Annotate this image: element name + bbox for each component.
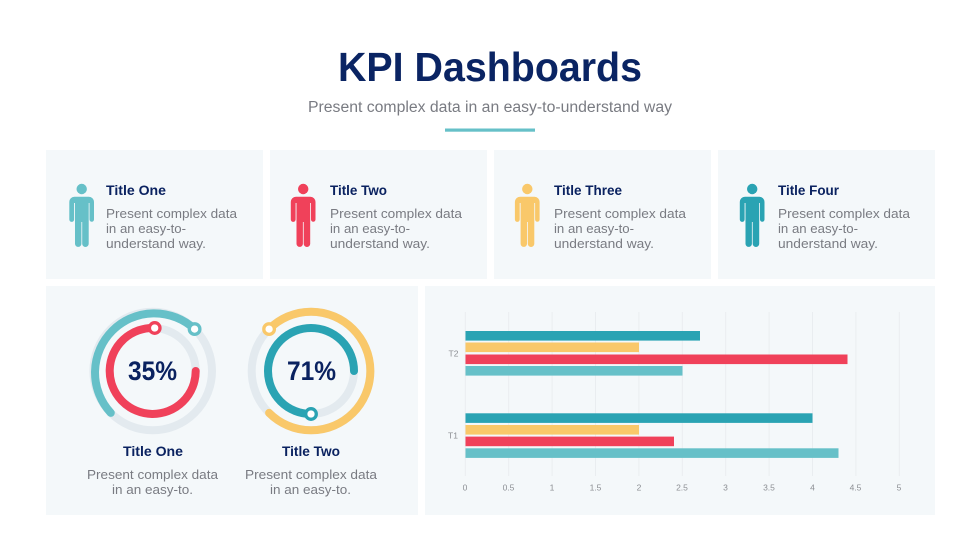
title: KPI Dashboards [338, 44, 642, 90]
text: description three [554, 206, 687, 251]
panel: title three [494, 150, 711, 279]
panel: bar chart [425, 286, 935, 515]
icon: person dark teal [740, 184, 764, 247]
x axis labels: 1.5 [590, 482, 602, 492]
bars: T1 [466, 413, 838, 458]
y axis labels: T2 [449, 348, 459, 358]
x axis labels: 4.5 [850, 482, 862, 492]
icon: person yellow [515, 184, 540, 247]
heading: donut title two: Title Two [282, 443, 340, 459]
x axis labels: 1 [550, 482, 555, 492]
x axis labels: 2.5 [676, 482, 688, 492]
heading: donut title one: Title One [123, 443, 183, 459]
y axis labels: T1 [448, 430, 458, 440]
heading: title four: Title Four [778, 182, 840, 198]
icon: person light teal [69, 184, 94, 247]
subtitle: Present complex data in an easy-to-understand way [308, 99, 672, 116]
text: description four: Present complex data [778, 206, 911, 221]
grid lines [465, 312, 899, 476]
x axis labels [463, 482, 902, 492]
text: donut description two: in an easy-to. [270, 482, 351, 497]
text: description four: in an easy-to- [778, 221, 858, 236]
text: description two: understand way. [330, 236, 430, 251]
x axis labels: 2 [637, 482, 642, 492]
icon: person red [291, 184, 316, 247]
text: description one [106, 206, 238, 251]
heading: title two: Title Two [330, 182, 387, 198]
text: description three: understand way. [554, 236, 654, 251]
donut chart: 71%: 71% [287, 356, 336, 386]
text: description one: Present complex data [106, 206, 238, 221]
text: description three: Present complex data [554, 206, 687, 221]
x axis labels: 3 [723, 482, 728, 492]
x axis labels: 3.5 [763, 482, 775, 492]
panel: donut charts [46, 286, 418, 515]
title underline [445, 128, 535, 132]
text: donut description one [87, 467, 219, 497]
donut chart: 71% [252, 312, 370, 430]
panel: title one [46, 150, 263, 279]
y axis labels [448, 348, 459, 440]
text: donut description two: Present complex data [245, 467, 378, 482]
panel: title four [718, 150, 935, 279]
x axis labels: 0 [463, 482, 468, 492]
text: description two: in an easy-to- [330, 221, 410, 236]
x axis labels: 0.5 [503, 482, 515, 492]
text: donut description two [245, 467, 378, 497]
bars: T2 [466, 331, 848, 376]
panel: title two [270, 150, 487, 279]
heading: title three: Title Three [554, 182, 622, 198]
text: description four [778, 206, 911, 251]
text: description two [330, 206, 463, 251]
text: description four: understand way. [778, 236, 878, 251]
text: description three: in an easy-to- [554, 221, 634, 236]
text: description one: in an easy-to- [106, 221, 186, 236]
text: description two: Present complex data [330, 206, 463, 221]
text: donut description one: Present complex data [87, 467, 219, 482]
text: donut description one: in an easy-to. [112, 482, 193, 497]
x axis labels: 5 [897, 482, 902, 492]
donut chart: 35% [93, 312, 212, 430]
x axis labels: 4 [810, 482, 815, 492]
heading: title one: Title One [106, 182, 166, 198]
text: description one: understand way. [106, 236, 206, 251]
donut chart: 35%: 35% [128, 356, 177, 386]
